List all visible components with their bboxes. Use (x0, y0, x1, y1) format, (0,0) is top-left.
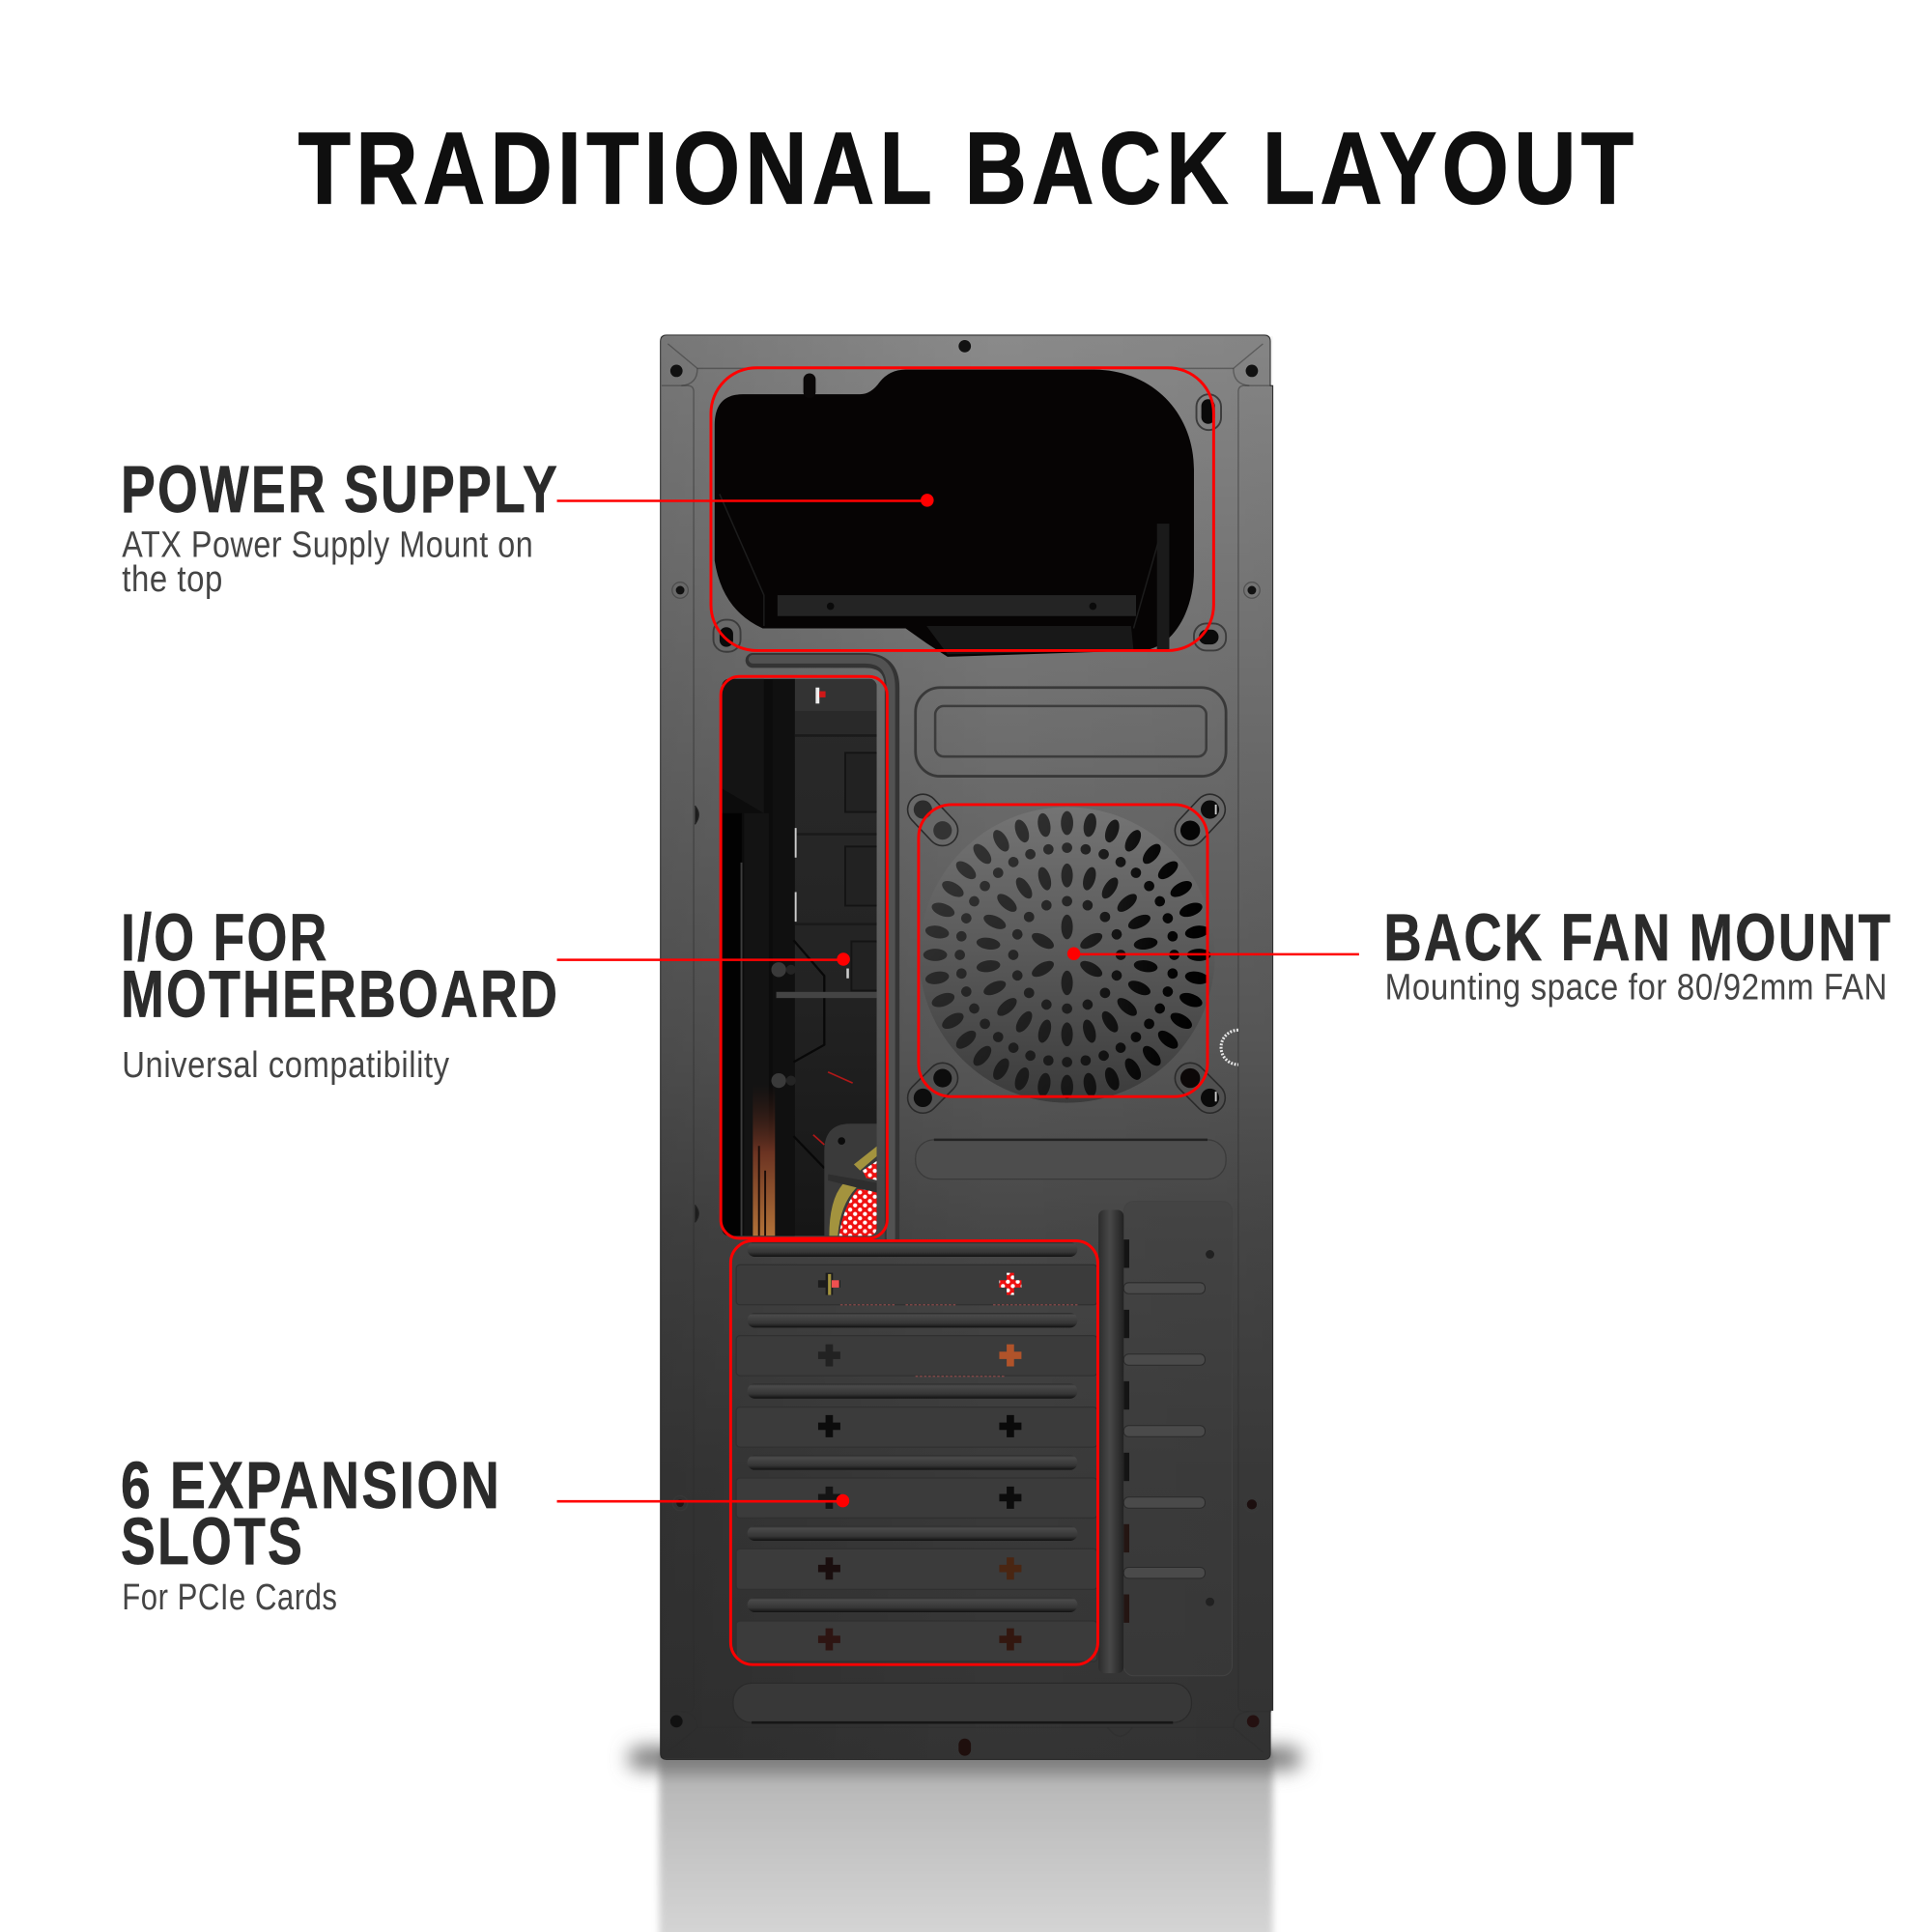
metal strip (741, 863, 742, 1236)
floor reflection (659, 1752, 1273, 1932)
fan screw (838, 1137, 845, 1145)
power supply opening (715, 370, 1194, 657)
description: Universal compatibility (122, 1044, 450, 1086)
leader dot (921, 494, 934, 507)
fan corner slots (914, 800, 1219, 1107)
base shadow (629, 1747, 1301, 1770)
leader line (1073, 953, 1359, 955)
case body (661, 335, 1273, 1759)
highlight box: back fan (919, 805, 1208, 1096)
motherboard bent pipe (753, 659, 892, 1238)
embossed rectangle (916, 688, 1226, 777)
PC case back panel (661, 335, 1273, 1759)
opening void (715, 370, 1194, 657)
description: For PCIe Cards (122, 1577, 337, 1618)
keyhole tab (804, 373, 815, 398)
leader dot (837, 1494, 849, 1507)
black column (722, 813, 742, 1236)
fan grille disc (920, 807, 1215, 1103)
heading line two: MOTHERBOARD (121, 956, 559, 1031)
heading: POWER SUPPLY (121, 452, 559, 526)
description: ATX Power Supply Mount on (122, 525, 533, 566)
left top panel (723, 678, 764, 684)
board column (773, 678, 794, 679)
capsule body (916, 1140, 1226, 1179)
top plate (795, 679, 877, 711)
interior fan frame (824, 1123, 877, 1236)
bottom capsule (733, 1683, 1191, 1722)
heading line two: SLOTS (121, 1504, 304, 1578)
tray screws (827, 603, 1096, 610)
vertical retention bar (1098, 1210, 1123, 1673)
panel plate (1123, 1202, 1233, 1676)
white ticks (795, 828, 849, 979)
side notches (695, 806, 698, 1222)
mid column (744, 813, 769, 1236)
label: I/O for motherboard (121, 900, 850, 1086)
rails (748, 1242, 1077, 1612)
glow stripes (759, 1146, 765, 1236)
leader line (557, 1500, 842, 1502)
far-left darkness (722, 679, 795, 1236)
capsule bottom edge (752, 1721, 1173, 1723)
highlight box: motherboard I/O (721, 676, 887, 1238)
rear tray (778, 595, 1136, 616)
dashed side emblem (1221, 1030, 1238, 1065)
drive bay windows (844, 752, 877, 991)
label: power supply (121, 452, 934, 600)
fan grille upper (863, 1161, 877, 1180)
board trace (793, 940, 824, 1168)
case shading (661, 336, 1273, 1758)
side screw rings (672, 582, 1260, 1512)
orange glow (753, 1084, 775, 1236)
red marks (813, 1072, 853, 1145)
cross bar (777, 992, 877, 998)
tabs (1123, 1283, 1205, 1578)
embossed frame lines (662, 344, 1271, 1752)
highlight box: expansion slots (730, 1240, 1097, 1664)
dark notches (1123, 1239, 1129, 1623)
knobs (771, 962, 796, 1088)
capsule body (733, 1683, 1191, 1722)
side strut (1157, 524, 1169, 649)
embossed capsule below fan (916, 1140, 1226, 1179)
highlight box: power supply (711, 368, 1213, 650)
red clip (815, 688, 819, 703)
slot plates (736, 1264, 1097, 1662)
PSU corner slots (714, 394, 1226, 652)
right retention panel (1123, 1202, 1233, 1676)
heading line one: I/O FOR (121, 900, 329, 975)
panel bands (795, 734, 877, 925)
leader line (557, 959, 842, 961)
fan strut (828, 1175, 877, 1193)
fan gold ring (829, 1146, 877, 1236)
leader line (557, 499, 926, 501)
expansion slots (736, 1242, 1097, 1662)
faint light leaks (840, 1305, 1078, 1377)
motherboard I/O opening (722, 679, 882, 1236)
description line two: the top (122, 558, 223, 600)
label: expansion slots (121, 1448, 849, 1618)
heading line one: 6 EXPANSION (121, 1448, 501, 1522)
strut line (720, 494, 1158, 629)
interior right column (742, 678, 877, 1236)
fan grille (839, 1189, 877, 1236)
leader dot (1067, 947, 1080, 960)
cross cutouts (818, 1273, 1021, 1651)
fan grille holes (923, 811, 1210, 1098)
lower tray (926, 626, 1133, 654)
label: back fan mount (1067, 900, 1892, 1008)
red clip tab (819, 692, 826, 697)
capsule top edge (934, 1139, 1208, 1141)
leader dot (837, 952, 850, 966)
title: TRADITIONAL BACK LAYOUT (298, 111, 1638, 225)
case screw holes (670, 340, 1260, 1756)
